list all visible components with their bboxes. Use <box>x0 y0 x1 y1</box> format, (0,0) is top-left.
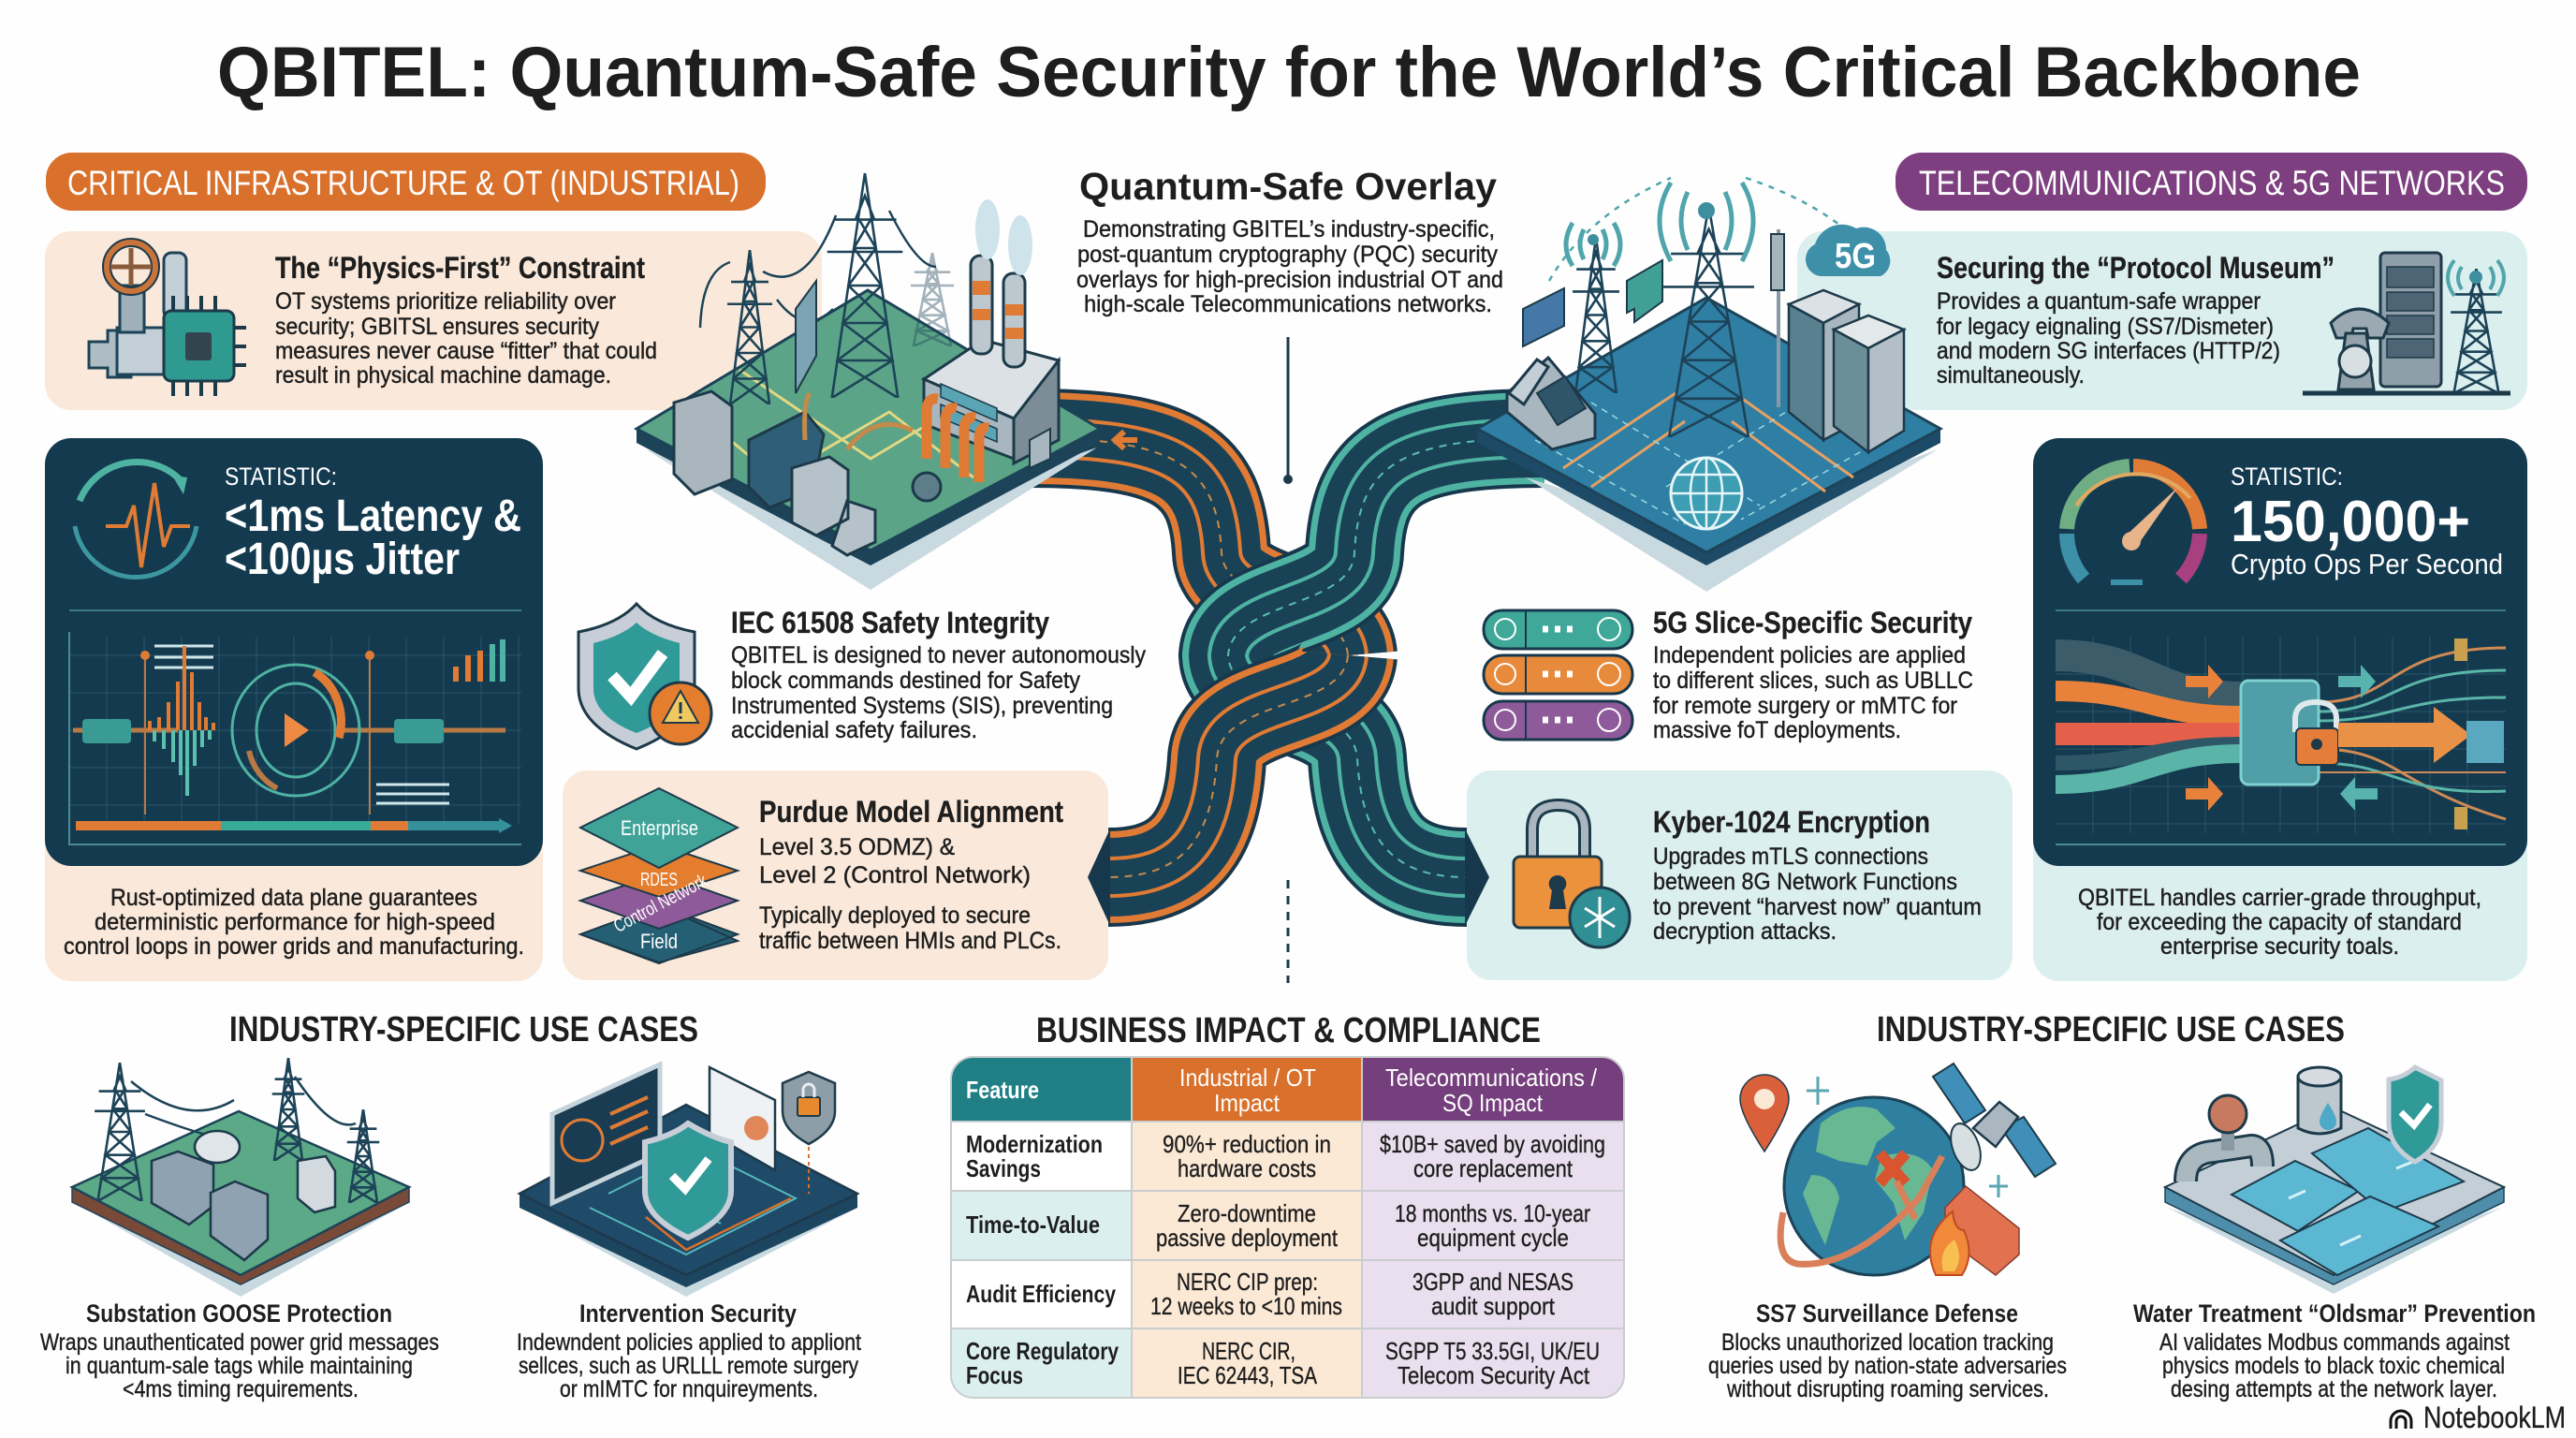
row: modernization savings: hardware costs <box>1178 1154 1316 1182</box>
row: core regulatory focus: Core Regulatory <box>966 1337 1119 1365</box>
heading: Intervention Security <box>579 1299 797 1328</box>
use case: ss7 surveillance defense <box>1708 1064 2067 1402</box>
text block: control loops in power grids and manufacturing. <box>64 933 524 960</box>
text block: decryption attacks. <box>1653 918 1837 945</box>
power towers <box>700 173 954 404</box>
table header: SQ Impact <box>1442 1089 1544 1117</box>
text block: to prevent “harvest now” quantum <box>1653 894 1982 920</box>
chart: jitter waveform <box>69 632 521 844</box>
icon: stopwatch pulse <box>75 462 197 578</box>
network globe <box>1671 458 1742 529</box>
text block <box>64 885 524 960</box>
row: core regulatory focus: Telecom Security Act <box>1398 1361 1590 1389</box>
feature: iec 61508 <box>578 604 1146 749</box>
row: core regulatory focus: IEC 62443, TSA <box>1178 1361 1318 1389</box>
text block: for exceeding the capacity of standard <box>2097 909 2462 935</box>
5g cloud <box>1806 225 1890 276</box>
arrow: road out of industrial platform <box>1115 432 1137 448</box>
text block: QBITEL is designed to never autonomously <box>731 642 1146 668</box>
icon: purdue layers: RDES <box>640 870 678 890</box>
illustration: substation <box>72 1058 409 1297</box>
icon: speed gauge <box>2067 466 2200 582</box>
road: telecom strand <box>1228 438 1544 877</box>
text block: security; GBITSL ensures security <box>275 314 599 340</box>
row: core regulatory focus: Focus <box>966 1361 1023 1389</box>
substation equipment <box>674 281 941 555</box>
arrow: road into purdue card <box>1088 829 1110 926</box>
text block: desing attempts at the network layer. <box>2171 1376 2497 1402</box>
road: industrial lower <box>1108 655 1348 877</box>
text block <box>1708 1329 2067 1402</box>
text block: QBITEL handles carrier-grade throughput, <box>2078 885 2481 911</box>
illustration: water treatment plant <box>2165 1067 2504 1294</box>
text block: physics models to black toxic chemical <box>2162 1353 2505 1379</box>
text block: Provides a quantum-safe wrapper <box>1937 288 2261 315</box>
row: time-to-value <box>966 1199 1590 1252</box>
stat value: <100µs Jitter <box>225 535 460 584</box>
panel: purdue model alignment <box>563 770 1108 980</box>
stat label: STATISTIC: <box>2231 462 2343 491</box>
heading: left use cases: INDUSTRY-SPECIFIC USE CASES <box>229 1010 698 1049</box>
section pill: telecommunications <box>1895 153 2527 211</box>
row: core regulatory focus: NERC CIR, <box>1202 1337 1295 1365</box>
arrow: road into kyber card <box>1465 829 1489 926</box>
text block: accidenial safety failures. <box>731 717 977 743</box>
text block: massive foT deployments. <box>1653 717 1901 743</box>
row: time-to-value: Zero-downtime <box>1178 1199 1316 1227</box>
text block <box>2159 1329 2510 1402</box>
stat value: <1ms Latency & <box>225 492 521 541</box>
heading: Purdue Model Alignment <box>759 795 1063 829</box>
road: industrial upper <box>1030 438 1348 655</box>
panel: physics-first constraint <box>45 231 822 410</box>
text block <box>731 642 1146 743</box>
use case: intervention security <box>517 1064 861 1402</box>
illustration: industrial platform <box>637 173 1100 590</box>
icon: purdue layers: Field <box>640 930 678 953</box>
icon: server, phone and antenna <box>2303 253 2510 393</box>
text block <box>1653 642 1973 743</box>
text block: <4ms timing requirements. <box>123 1376 359 1402</box>
icon: shield with warning <box>578 604 711 749</box>
icon: valve and chip <box>89 242 246 396</box>
row: audit efficiency: 3GPP and NESAS <box>1412 1268 1573 1296</box>
text block: simultaneously. <box>1937 362 2085 389</box>
text block: Indewndent policies applied to appliont <box>517 1329 861 1356</box>
stat value <box>225 492 521 584</box>
text block: OT systems prioritize reliability over <box>275 288 616 315</box>
text block: sellces, such as URLLL remote surgery <box>519 1353 858 1379</box>
heading: IEC 61508 Safety Integrity <box>731 606 1049 639</box>
illustration: security dashboard <box>520 1064 857 1297</box>
text block: and modern SG interfaces (HTTP/2) <box>1937 338 2280 364</box>
table header: Impact <box>1214 1089 1281 1117</box>
icon: padlock with network <box>1514 805 1630 947</box>
stat value: 150,000+ <box>2231 490 2470 554</box>
text block <box>1937 288 2280 389</box>
text block: Rust-optimized data plane guarantees <box>110 885 477 911</box>
heading: business impact: BUSINESS IMPACT & COMPLIANCE <box>1036 1011 1541 1050</box>
text block: Demonstrating GBITEL’s industry-specific, <box>1083 216 1495 242</box>
text block: post-quantum cryptography (PQC) security <box>1077 242 1498 268</box>
row: core regulatory focus: SGPP T5 33.5GI, UK/EU <box>1385 1337 1600 1365</box>
row: time-to-value: passive deployment <box>1156 1224 1339 1252</box>
factory <box>924 199 1059 482</box>
row: audit efficiency: audit support <box>1431 1292 1556 1320</box>
text block: in quantum-sale tags while maintaining <box>66 1353 413 1379</box>
heading: Securing the “Protocol Museum” <box>1937 251 2334 285</box>
heading: Substation GOOSE Protection <box>86 1299 392 1328</box>
panel: protocol museum <box>1797 231 2527 410</box>
text block: enterprise security toals. <box>2160 933 2399 960</box>
rotary phone <box>1507 358 1595 449</box>
text block: or mIMTC for nnquireyments. <box>560 1376 818 1402</box>
row: modernization savings: core replacement <box>1413 1154 1573 1182</box>
heading: Kyber-1024 Encryption <box>1653 805 1930 839</box>
text block <box>1076 216 1503 317</box>
row: audit efficiency: NERC CIP prep: <box>1177 1268 1318 1296</box>
title: QBITEL: Quantum-Safe Security for the World’s Critical Backbone <box>217 33 2361 112</box>
text block: Wraps unauthenticated power grid messages <box>40 1329 439 1356</box>
text block: measures never cause “fitter” that could <box>275 338 657 364</box>
text block: Upgrades mTLS connections <box>1653 844 1928 870</box>
icon: purdue layers: Enterprise <box>621 816 698 840</box>
heading: 5G Slice-Specific Security <box>1653 606 1972 639</box>
text block: overlays for high-precision industrial OT and <box>1076 267 1503 293</box>
heading: The “Physics-First” Constraint <box>275 251 645 285</box>
icon: network slices <box>1484 610 1632 740</box>
speech bubbles <box>1523 260 1662 346</box>
text block: AI validates Modbus commands against <box>2159 1329 2510 1356</box>
panel: latency statistic <box>45 438 543 981</box>
connector lines through centre <box>1283 337 1293 983</box>
text block: queries used by nation-state adversaries <box>1708 1353 2067 1379</box>
icon: purdue layers: Control Network <box>610 870 711 937</box>
use case: water treatment oldsmar prevention <box>2133 1067 2536 1402</box>
heading: SS7 Surveillance Defense <box>1756 1299 2018 1328</box>
centre intro <box>1076 165 1503 317</box>
table header: Industrial / OT <box>1179 1064 1316 1092</box>
text block <box>517 1329 861 1402</box>
row: modernization savings: $10B+ saved by avoiding <box>1380 1130 1605 1158</box>
text block: deterministic performance for high-speed <box>95 909 495 935</box>
text block: Level 3.5 ODMZ) & <box>759 834 955 860</box>
row: audit efficiency: Audit Efficiency <box>966 1280 1116 1308</box>
illustration: telecom platform <box>1477 178 1940 592</box>
table header: Feature <box>966 1076 1039 1104</box>
row: modernization savings: Savings <box>966 1154 1041 1182</box>
server racks <box>1789 290 1904 452</box>
text block <box>40 1329 439 1402</box>
cell towers <box>1549 178 1839 437</box>
text block: Level 2 (Control Network) <box>759 862 1031 888</box>
text block: Independent policies are applied <box>1653 642 1966 668</box>
5g cloud: 5G <box>1835 237 1876 276</box>
heading: Quantum-Safe Overlay <box>1079 165 1497 208</box>
row: modernization savings <box>966 1130 1605 1182</box>
row: audit efficiency <box>966 1268 1573 1320</box>
text block: Blocks unauthorized location tracking <box>1721 1329 2054 1356</box>
panel: kyber-1024 encryption <box>1467 770 2012 980</box>
text block: Typically deployed to secure <box>759 902 1031 929</box>
heading: right use cases: INDUSTRY-SPECIFIC USE CASES <box>1877 1010 2345 1049</box>
central braided data roads <box>1030 432 1544 926</box>
table: business impact and compliance <box>951 1057 1624 1398</box>
illustration: globe, satellite and firewall <box>1740 1064 2056 1275</box>
text block: without disrupting roaming services. <box>1726 1376 2049 1402</box>
text block <box>2078 885 2481 960</box>
panel: throughput statistic <box>2033 438 2527 981</box>
row: core regulatory focus <box>966 1337 1600 1389</box>
text block: to different slices, such as UBLLC <box>1653 668 1973 694</box>
stat label: STATISTIC: <box>225 462 337 491</box>
chart: data flow through lock <box>2056 637 2506 844</box>
text block <box>275 288 657 389</box>
row: modernization savings: Modernization <box>966 1130 1103 1158</box>
section pill: critical infrastructure: CRITICAL INFRASTRUCTURE & OT (INDUSTRIAL) <box>67 164 739 202</box>
text block: Instrumented Systems (SIS), preventing <box>731 693 1113 719</box>
text block: high-scale Telecommunications networks. <box>1084 291 1492 317</box>
text block: result in physical machine damage. <box>275 362 611 389</box>
row: time-to-value: Time-to-Value <box>966 1211 1100 1239</box>
text block: between 8G Network Functions <box>1653 869 1957 895</box>
row: audit efficiency: 12 weeks to <10 mins <box>1150 1292 1342 1320</box>
text block: traffic between HMIs and PLCs. <box>759 928 1061 954</box>
row: time-to-value: equipment cycle <box>1417 1224 1569 1252</box>
text block: for legacy eignaling (SS7/Dismeter) <box>1937 314 2274 340</box>
text block: for remote surgery or mMTC for <box>1653 693 1957 719</box>
text block <box>1653 844 1982 945</box>
table header <box>966 1064 1598 1117</box>
row: time-to-value: 18 months vs. 10-year <box>1395 1199 1590 1227</box>
table header: Telecommunications / <box>1385 1064 1598 1092</box>
use case: substation goose protection <box>40 1058 439 1402</box>
feature: 5g slice security <box>1484 606 1973 743</box>
row: modernization savings: 90%+ reduction in <box>1163 1130 1331 1158</box>
section pill: critical infrastructure <box>46 153 766 211</box>
text block <box>759 834 1061 954</box>
stat caption: Crypto Ops Per Second <box>2231 548 2503 580</box>
icon: purdue layers <box>580 788 738 963</box>
text block: block commands destined for Safety <box>731 668 1080 694</box>
